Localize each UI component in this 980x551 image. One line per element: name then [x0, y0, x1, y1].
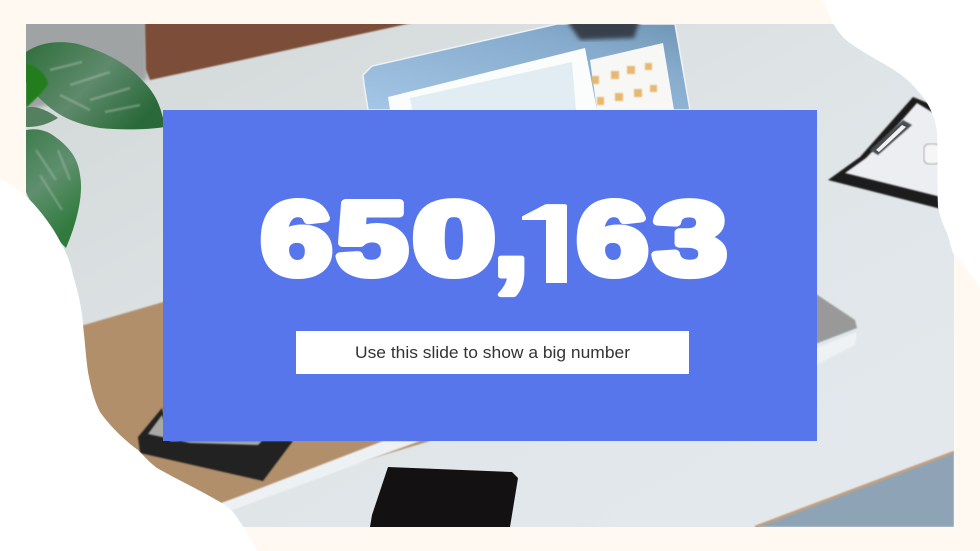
big number — [260, 198, 727, 298]
laptop lid — [363, 24, 690, 110]
desk front edge — [222, 441, 420, 512]
hard drive — [138, 408, 293, 481]
big number: 0 — [413, 181, 495, 297]
big number: 5 — [336, 181, 408, 296]
wall corner — [26, 24, 148, 109]
blue number panel — [163, 110, 817, 441]
big number: , — [491, 168, 531, 302]
blob: upper right white shape — [823, 0, 980, 288]
brown chair — [144, 24, 413, 81]
laptop lip — [817, 333, 856, 364]
clipboard — [828, 97, 945, 210]
floor at lower right — [755, 452, 954, 527]
big number: 1 — [516, 185, 588, 301]
desk edge line — [755, 452, 954, 527]
big number: 6 — [577, 181, 648, 296]
black device — [370, 467, 518, 527]
big number: 3 — [653, 182, 727, 297]
laptop base — [817, 294, 858, 344]
caption text: Use this slide to show a big number — [355, 343, 630, 362]
caption box — [296, 331, 689, 374]
file window — [590, 43, 674, 110]
big number: 6 — [261, 181, 332, 296]
blob: lower left white shape — [0, 178, 257, 551]
dark screen reflection — [566, 20, 640, 40]
front window — [388, 48, 597, 110]
folder icons — [592, 63, 657, 105]
cork mat — [83, 301, 430, 504]
plant leaves — [26, 42, 165, 248]
